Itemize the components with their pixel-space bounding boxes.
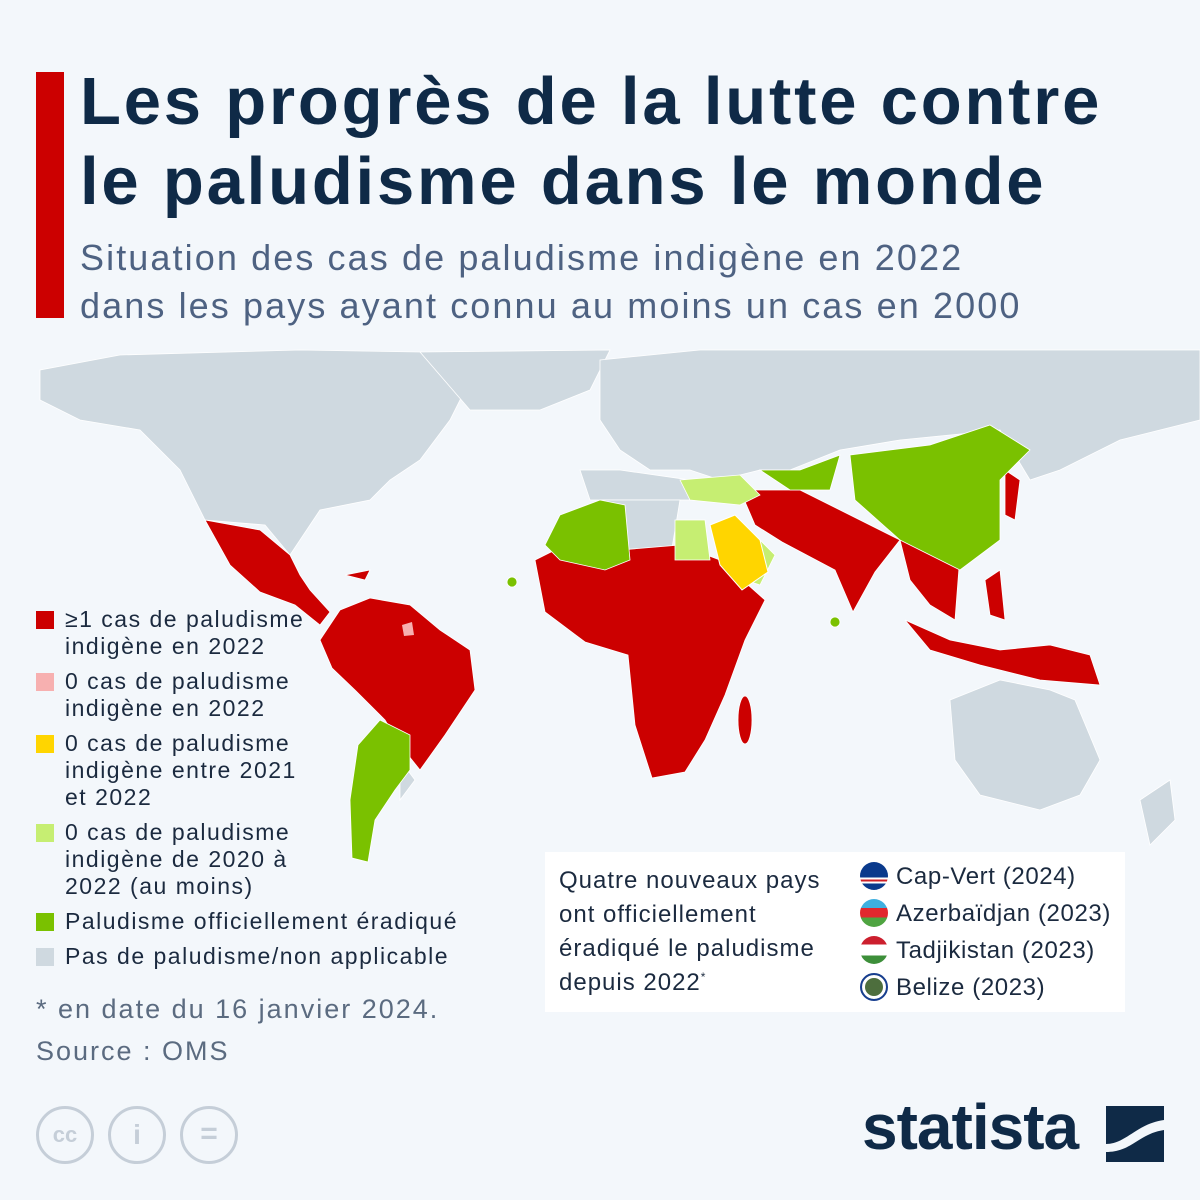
legend item: yellow: et 2022 — [65, 784, 152, 810]
legend item: light green — [36, 819, 290, 899]
callout text: éradiqué le paludisme — [559, 935, 815, 962]
legend item: light green: indigène de 2020 à — [65, 846, 288, 872]
callout text: Quatre nouveaux pays — [559, 867, 820, 894]
flag list: Cap-Vert (2024) — [896, 863, 1076, 890]
icons: creative commons: = — [200, 1117, 218, 1150]
flag list: Azerbaïdjan (2023) — [896, 900, 1111, 927]
flag list — [860, 862, 1111, 1001]
callout box: new countries — [545, 852, 1125, 1012]
legend item: pink: indigène en 2022 — [65, 695, 266, 721]
legend item: pink — [36, 668, 290, 721]
legend item: red: indigène en 2022 — [65, 633, 266, 659]
icons: creative commons: i — [133, 1119, 141, 1150]
flag list: Tadjikistan (2023) — [896, 937, 1095, 964]
callout text: depuis 2022* — [559, 969, 706, 996]
legend item: green: Paludisme officiellement éradiqué — [65, 908, 458, 934]
legend item: yellow: 0 cas de paludisme — [65, 730, 290, 756]
icons: creative commons: cc — [53, 1122, 77, 1147]
legend item: yellow — [36, 730, 297, 810]
subtitle — [80, 237, 1021, 326]
legend — [36, 606, 458, 969]
legend item: yellow: indigène entre 2021 — [65, 757, 297, 783]
legend item: pink: 0 cas de paludisme — [65, 668, 290, 694]
icons: creative commons — [36, 1106, 238, 1164]
flag list: Belize (2023) — [896, 974, 1045, 1001]
legend item: grey: Pas de paludisme/non applicable — [65, 943, 449, 969]
title: Les progrès de la lutte contre — [80, 64, 1102, 139]
legend item: red — [36, 606, 304, 659]
statista logo: statista — [862, 1091, 1078, 1163]
callout text — [559, 867, 820, 996]
callout text: ont officiellement — [559, 901, 757, 928]
subtitle: dans les pays ayant connu au moins un cas en 2000 — [80, 285, 1021, 326]
legend item: light green: 0 cas de paludisme — [65, 819, 290, 845]
footnote and source: * en date du 16 janvier 2024. — [36, 994, 439, 1024]
red accent bar — [36, 72, 64, 318]
footnote and source: Source : OMS — [36, 1036, 230, 1066]
title: le paludisme dans le monde — [80, 144, 1046, 219]
legend item: red: ≥1 cas de paludisme — [65, 606, 304, 632]
subtitle: Situation des cas de paludisme indigène en 2022 — [80, 237, 963, 278]
footnote and source — [36, 994, 439, 1066]
title — [80, 64, 1102, 219]
legend item: light green: 2022 (au moins) — [65, 873, 254, 899]
world map — [40, 350, 1200, 862]
